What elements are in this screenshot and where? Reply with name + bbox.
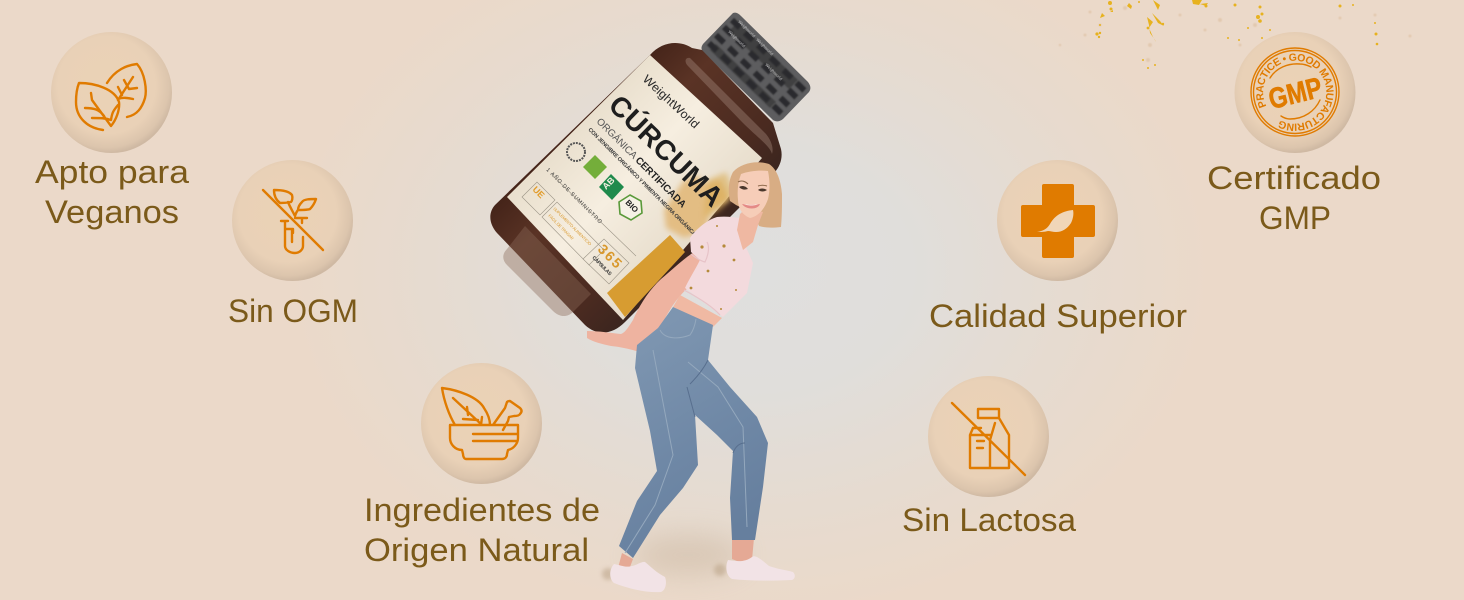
label: GMP — [1259, 200, 1331, 236]
label: Calidad Superior — [929, 298, 1187, 334]
jeans seams — [625, 319, 747, 553]
label: Veganos — [45, 194, 179, 230]
bottle cap: Weightworld — [737, 19, 756, 38]
label — [35, 154, 189, 230]
label texts: 1 AÑO DE SUMINISTRO — [545, 166, 604, 226]
icon: mortar with leaf — [421, 363, 542, 484]
label — [1207, 160, 1381, 236]
glass highlights — [686, 58, 773, 154]
feature: Sin OGM — [228, 160, 358, 329]
label texts: WeightWorld — [640, 72, 702, 131]
product: turmeric supplement bottle — [490, 13, 810, 333]
bottle cap: Weightworld — [727, 29, 746, 48]
label texts — [545, 72, 729, 246]
back leg and ankle — [618, 538, 754, 568]
feature: Ingredientes de Origen Natural — [364, 363, 600, 568]
face — [738, 171, 770, 218]
label texts: CÚRCUMA — [603, 89, 729, 213]
shoes — [610, 556, 795, 592]
label: Ingredientes de — [364, 492, 600, 528]
label: Origen Natural — [364, 532, 589, 568]
badge: 365 capsules: 365 — [595, 241, 625, 271]
label texts: FÁCIL DE TRAGAR — [547, 213, 575, 241]
icon: cross with leaf — [997, 160, 1118, 281]
certification seals: AB — [600, 175, 617, 191]
icon: two leaves — [51, 32, 172, 153]
hand and arm — [587, 251, 706, 353]
bottle cap: Weightworld — [764, 62, 783, 81]
certification seals: BIO — [624, 198, 640, 214]
amber glass body — [490, 43, 782, 333]
paper label — [507, 55, 762, 320]
jeans — [619, 307, 768, 558]
icon: crossed plant in test tube — [232, 160, 353, 281]
bottle cap: Weightworld — [755, 37, 774, 56]
badge: 365 capsules — [531, 184, 625, 278]
ginger illustration on label — [664, 175, 730, 238]
midriff — [673, 295, 722, 327]
info boxes — [522, 175, 636, 284]
badge: 365 capsules: CÁPSULAS — [591, 254, 614, 278]
label texts: ORGÁNICA CERTIFICADA — [594, 115, 689, 210]
icon: crossed milk carton — [928, 376, 1049, 497]
label: Sin OGM — [228, 293, 358, 329]
neck — [737, 208, 763, 250]
person: woman carrying the bottle — [587, 162, 795, 592]
hair — [729, 162, 782, 228]
label — [364, 492, 600, 568]
label: Apto para — [35, 154, 189, 190]
floor shadows — [602, 535, 743, 580]
label texts: CON JENGIBRE ORGÁNICO Y PIMIENTA NEGRA ORGÁNICA — [587, 126, 698, 237]
label: Sin Lactosa — [902, 502, 1076, 538]
bottle cap — [702, 13, 810, 121]
eyes and smile — [738, 181, 767, 208]
label texts: SUPLEMENTO ALIMENTICIO — [552, 206, 593, 246]
feature: Apto para Veganos — [35, 32, 189, 230]
feature: Calidad Superior — [929, 160, 1187, 334]
icon: GMP stamp: GMP — [1265, 72, 1326, 116]
icon: GMP stamp — [1234, 32, 1356, 153]
feature: Certificado GMP — [1207, 32, 1381, 236]
badge: 365 capsules: UE — [531, 184, 547, 200]
crop top — [685, 217, 753, 317]
turmeric powder dust — [1059, 0, 1412, 69]
icon: GMP stamp: PRACTICE • GOOD MANUFACTURING — [1256, 54, 1334, 132]
certification seals — [567, 143, 642, 220]
orange label band — [607, 235, 685, 317]
feature: Sin Lactosa — [902, 376, 1076, 538]
label: Certificado — [1207, 160, 1381, 196]
